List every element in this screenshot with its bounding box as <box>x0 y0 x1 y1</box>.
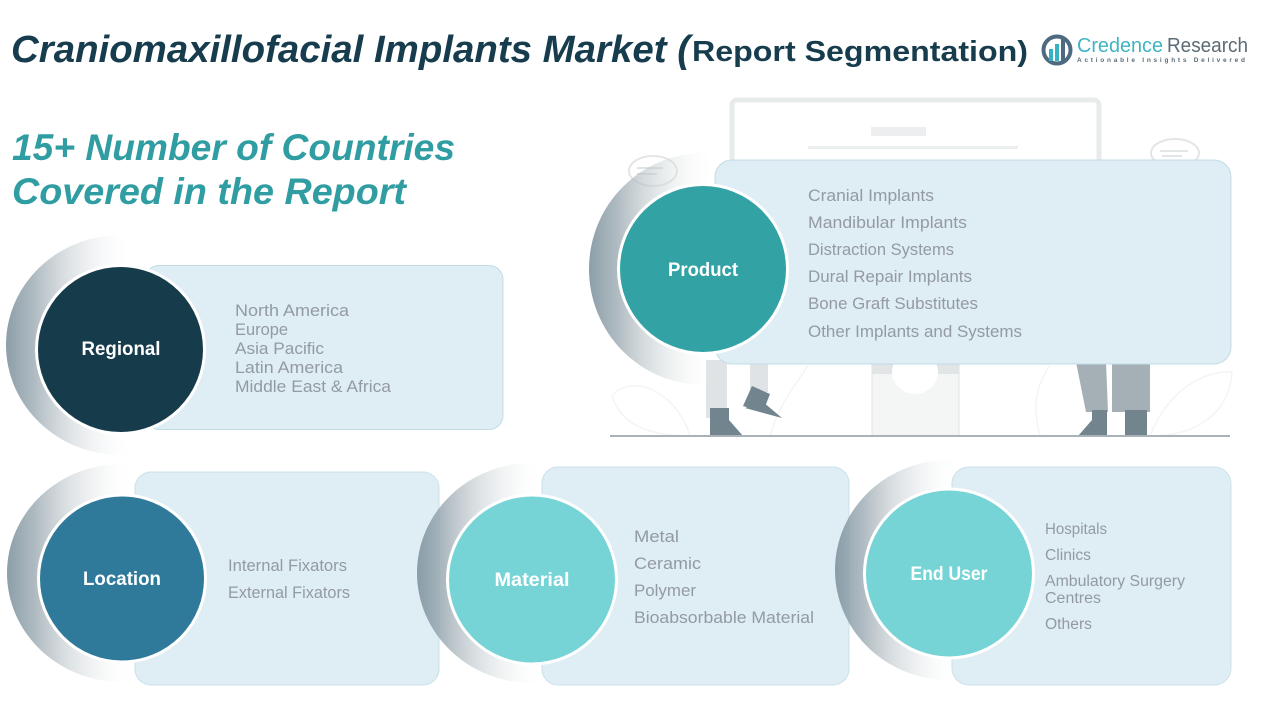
node <box>618 184 788 354</box>
list: Bone Graft Substitutes <box>808 294 978 313</box>
list: Asia Pacific <box>235 339 324 358</box>
logo: Credence Research: Actionable Insights Delivered <box>1077 57 1245 64</box>
list: Latin America <box>235 358 344 377</box>
halo <box>589 153 819 385</box>
node <box>36 266 204 434</box>
list: Ceramic <box>634 554 702 573</box>
list: Internal Fixators <box>228 556 347 575</box>
background illustration <box>610 100 1232 437</box>
card <box>715 160 1231 364</box>
halo <box>7 464 237 682</box>
list <box>235 301 392 396</box>
halo <box>417 463 647 683</box>
subtitle: countries covered: Covered in the Report <box>12 171 408 212</box>
halo <box>835 460 1063 680</box>
list: North America <box>235 301 350 320</box>
card <box>145 266 503 430</box>
panel: Location <box>7 464 439 685</box>
node: Location <box>83 569 161 590</box>
title: Craniomaxillofacial Implants Market ( <box>11 29 694 71</box>
halo <box>6 235 236 455</box>
speech bubble right <box>1151 139 1199 167</box>
speech bubble left <box>629 156 677 186</box>
ground line <box>610 435 1230 437</box>
node: End User <box>910 564 988 585</box>
title <box>11 29 1028 71</box>
list: Polymer <box>634 581 696 600</box>
node: Product <box>668 260 739 281</box>
card <box>542 467 849 685</box>
list: Metal <box>634 527 679 546</box>
node <box>448 495 616 664</box>
list <box>808 186 1022 341</box>
list: Cranial Implants <box>808 186 934 205</box>
logo: Credence Research: Credence <box>1077 35 1163 57</box>
list: Ambulatory Surgery <box>1045 573 1185 590</box>
node <box>864 489 1034 658</box>
title: Report Segmentation) <box>692 36 1028 68</box>
podium <box>872 350 959 436</box>
list: Distraction Systems <box>808 240 954 259</box>
list: Dural Repair Implants <box>808 267 972 286</box>
list <box>1045 521 1185 633</box>
list: Middle East & Africa <box>235 377 392 396</box>
panel: Material <box>417 463 849 685</box>
list: Europe <box>235 320 288 339</box>
list: Other Implants and Systems <box>808 322 1022 341</box>
panel: Regional <box>6 235 503 455</box>
card <box>135 472 439 685</box>
list <box>228 556 350 602</box>
node <box>38 495 206 662</box>
list: Clinics <box>1045 547 1091 564</box>
panel: End User <box>835 460 1231 685</box>
list: Bioabsorbable Material <box>634 608 814 627</box>
person left legs <box>706 360 782 436</box>
list: Hospitals <box>1045 521 1107 538</box>
logo: Credence Research <box>1044 35 1248 64</box>
person right legs <box>1076 362 1150 436</box>
list: Others <box>1045 616 1092 633</box>
list: External Fixators <box>228 583 350 602</box>
subtitle: countries covered: 15+ Number of Countries <box>12 127 455 168</box>
panel: Product <box>589 153 1231 385</box>
list: Centres <box>1045 590 1101 607</box>
icon: logo bars <box>1044 36 1070 64</box>
logo: Credence Research: Research <box>1167 35 1248 57</box>
card <box>952 467 1231 685</box>
list: Mandibular Implants <box>808 213 967 232</box>
monitor <box>732 100 1099 220</box>
node: Regional <box>82 339 160 360</box>
list <box>634 527 814 627</box>
leaves <box>612 365 1232 436</box>
subtitle: countries covered <box>12 127 455 212</box>
node: Material <box>494 570 570 591</box>
